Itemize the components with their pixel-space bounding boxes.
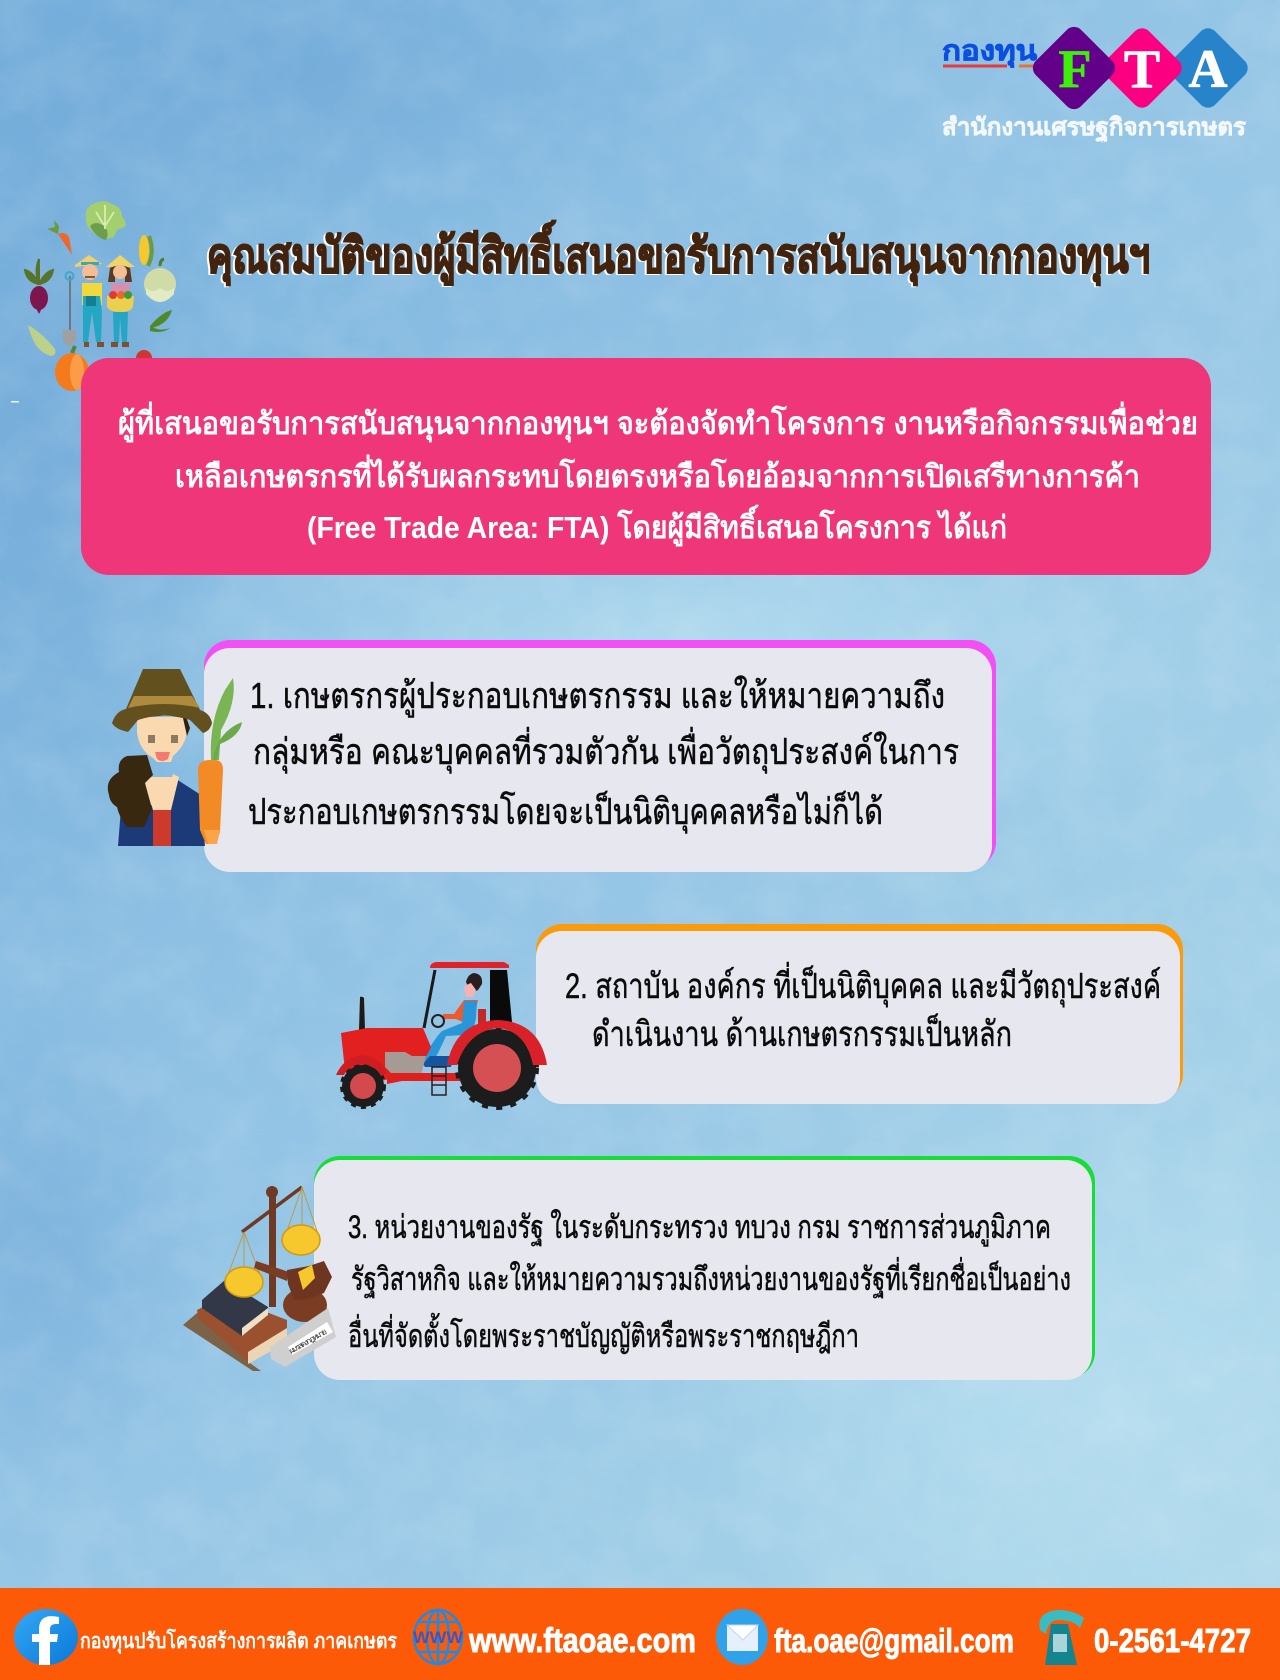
pumpkin bbox=[55, 346, 89, 391]
icon: globe www: WWW bbox=[413, 1628, 464, 1647]
website: www.ftaoae.com bbox=[468, 1622, 696, 1660]
icon: woman farmer with carrot bbox=[108, 669, 242, 846]
item 1 text: 1. เกษตรกรผู้ประกอบเกษตรกรรม และให้หมายความถึง bbox=[250, 675, 945, 718]
logo: FTA fund bbox=[942, 23, 1252, 143]
icon: globe www bbox=[413, 1610, 464, 1664]
intro text: เหลือเกษตรกรที่ได้รับผลกระทบโดยตรงหรือโดยอ้อมจากการเปิดเสรีทางการค้า bbox=[175, 454, 1140, 494]
logo subtitle: สำนักงานเศรษฐกิจการเกษตร bbox=[942, 114, 1246, 143]
pea pods bbox=[150, 310, 172, 332]
item 1 text bbox=[248, 675, 959, 834]
zucchini bbox=[28, 325, 56, 356]
man farmer bbox=[63, 255, 104, 347]
rear fender bbox=[447, 1020, 547, 1065]
phone number: 0-2561-4727 bbox=[1094, 1622, 1251, 1659]
item 3 text: 3. หน่วยงานของรัฐ ในระดับกระทรวง ทบวง กรม ราชการส่วนภูมิภาค bbox=[348, 1209, 1051, 1247]
logo diamond T: T bbox=[1124, 39, 1160, 99]
item 3 text: อื่นที่จัดตั้งโดยพระราชบัญญัติหรือพระราชกฤษฎีกา bbox=[348, 1313, 859, 1354]
front wheel bbox=[342, 1065, 384, 1107]
cabbage bbox=[86, 201, 126, 240]
logo diamond A: A bbox=[1188, 39, 1228, 99]
tractor body bbox=[341, 1028, 431, 1083]
logo diamond A bbox=[1164, 24, 1252, 112]
icon: mail bbox=[716, 1609, 768, 1665]
logo diamond T bbox=[1098, 24, 1186, 112]
cab bbox=[424, 970, 435, 1028]
front fender bbox=[336, 1055, 387, 1076]
corn bbox=[139, 235, 152, 266]
squash bbox=[144, 259, 176, 302]
icon: scales, books and gavel bbox=[183, 1186, 336, 1371]
panel: item 2 organisations bbox=[536, 924, 1183, 1104]
item 1 text: ประกอบเกษตรกรรมโดยจะเป็นนิติบุคคลหรือไม่ก็ได้ bbox=[248, 789, 883, 834]
icon: telephone bbox=[1039, 1610, 1084, 1665]
intro text: (Free Trade Area: FTA) โดยผู้มีสิทธิ์เสนอโครงการ ได้แก่ bbox=[307, 504, 1007, 547]
beet bbox=[25, 259, 53, 314]
item 3 text bbox=[348, 1209, 1071, 1354]
panel: item 1 farmers bbox=[204, 640, 996, 872]
email: fta.oae@gmail.com bbox=[774, 1622, 1014, 1659]
steps bbox=[432, 1067, 446, 1095]
exhaust bbox=[359, 997, 365, 1030]
panel: item 3 government bbox=[314, 1156, 1095, 1380]
carrot bbox=[47, 220, 72, 255]
icon: farmers with vegetables bbox=[25, 201, 176, 391]
name plate: ผมรสดงกฎหมาย bbox=[288, 1327, 328, 1356]
woman farmer bbox=[106, 255, 135, 347]
driver bbox=[422, 973, 486, 1067]
logo diamond F: F bbox=[1058, 39, 1092, 99]
icon: facebook bbox=[14, 1609, 78, 1665]
logo wordmark: กองทุน bbox=[942, 35, 1037, 68]
name plate bbox=[270, 1308, 336, 1367]
icon: red tractor bbox=[336, 962, 547, 1107]
item 2 text: ดำเนินงาน ด้านเกษตรกรรมเป็นหลัก bbox=[592, 1013, 1012, 1054]
item 1 text: กลุ่มหรือ คณะบุคคลที่รวมตัวกัน เพื่อวัตถุประสงค์ในการ bbox=[253, 727, 959, 774]
panel: introduction bbox=[81, 358, 1211, 575]
item 2 text bbox=[565, 962, 1161, 1054]
tomato bbox=[136, 350, 152, 366]
footer bar bbox=[0, 1588, 1280, 1680]
books bbox=[197, 1280, 287, 1364]
logo diamond F bbox=[1029, 23, 1119, 113]
rear wheel bbox=[458, 1029, 536, 1107]
scale bbox=[225, 1186, 320, 1307]
gavel bbox=[254, 1261, 332, 1322]
facebook page name: กองทุนปรับโครงสร้างการผลิต ภาคเกษตร bbox=[80, 1628, 398, 1655]
intro text: ผู้ที่เสนอขอรับการสนับสนุนจากกองทุนฯ จะต้องจัดทำโครงการ งานหรือกิจกรรมเพื่อช่วย bbox=[118, 401, 1198, 443]
intro text bbox=[118, 401, 1198, 547]
